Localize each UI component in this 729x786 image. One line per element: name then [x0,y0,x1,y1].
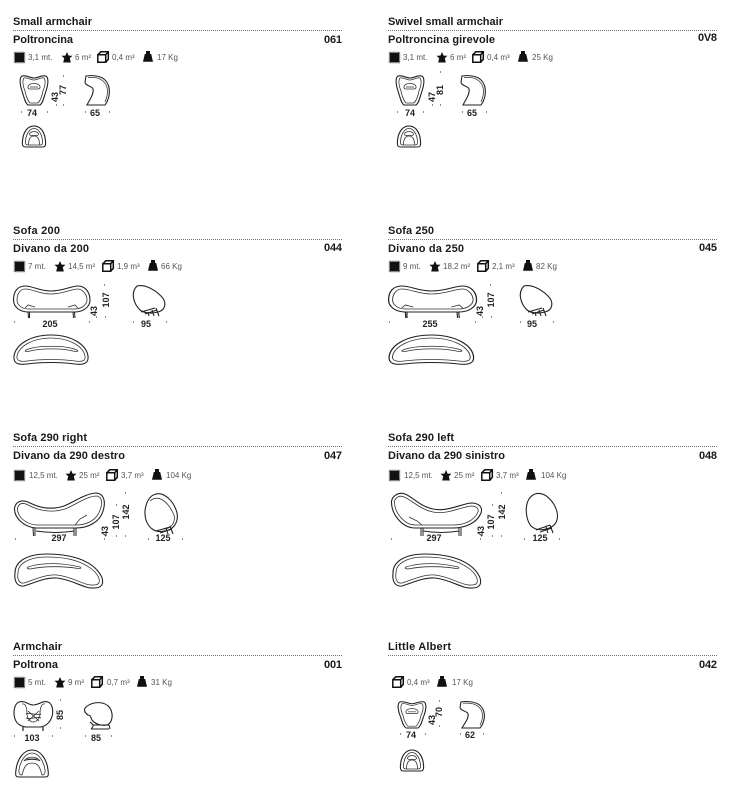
product code: 042 [699,659,717,671]
subheading: Poltroncina girevole: Poltroncina girevole [388,34,495,46]
specs row [390,51,553,62]
panel: Sofa 200 [13,225,343,364]
specs row: 7 mt. [28,262,46,271]
dimensions: 70 [434,707,444,717]
specs row: 0,4 m³ [112,53,135,62]
specs row: 3,7 m³ [496,471,519,480]
specs row: 9 mt. [403,262,421,271]
specs row: 0,7 m³ [107,678,130,687]
dimensions: 107 [486,292,496,308]
drawing: side view [145,494,177,534]
specs row: 2,1 m³ [492,262,515,271]
dimensions: 107 [486,514,496,530]
drawing: side view [461,76,485,105]
dimensions: 43 [427,715,437,725]
dimensions [14,700,112,743]
drawing: front view [389,286,477,318]
specs row [390,469,566,480]
specs row: 12,5 mt. [29,471,58,480]
specs row: 1,9 m³ [117,262,140,271]
dimensions [21,76,110,118]
product code: 045 [699,242,717,254]
drawing: plan view [14,335,88,364]
specs row: 0,4 m³ [487,53,510,62]
specs row: 25 m² [454,471,475,480]
heading: Sofa 250: Sofa 250 [388,225,434,237]
drawing: plan view [400,750,424,771]
dimensions: 107 [101,292,111,308]
dimensions: 125 [155,533,171,543]
panel: Armchair [13,641,342,777]
subheading: Poltrona: Poltrona [13,659,59,671]
specs row [14,51,178,62]
dimensions [397,72,487,118]
specs row: 12,5 mt. [404,471,433,480]
specs row: 104 Kg [541,471,566,480]
dimensions [389,285,554,329]
dimensions [14,285,167,329]
dimensions: 65 [467,108,477,118]
panel: Swivel small armchair [388,16,717,147]
panel: Sofa 250 [388,225,717,364]
specs row: 31 Kg [151,678,172,687]
drawing: side view [85,703,112,729]
dimensions: 297 [51,533,67,543]
heading: Sofa 290 right: Sofa 290 right [13,432,87,444]
specs row: 17 Kg [452,678,473,687]
dimensions: 297 [426,533,442,543]
specs row [393,676,473,687]
dimensions: 81 [435,85,445,95]
specs row: 82 Kg [536,262,557,271]
product code: 0V8 [698,32,717,44]
dimensions: 74 [406,730,416,740]
specs row: 18,2 m² [443,262,470,271]
dimensions: 85 [55,710,65,720]
subheading: Divano da 200: Divano da 200 [13,243,89,255]
dimensions: 43 [89,306,99,316]
dimensions: 43 [100,526,110,536]
heading: Sofa 290 left: Sofa 290 left [388,432,454,444]
drawing: front view [398,702,426,728]
subheading: Poltroncina: Poltroncina [13,34,74,46]
drawing: front view [14,702,53,731]
drawing: front view [20,76,48,105]
specs row: 25 m² [79,471,100,480]
panel: Little Albert [388,641,717,771]
dimensions: 74 [27,108,37,118]
dimensions: 205 [42,319,58,329]
specs row: 6 m² [450,53,466,62]
product code: 048 [699,450,717,462]
dimensions: 103 [24,733,40,743]
dimensions: 85 [91,733,101,743]
dimensions: 142 [121,504,131,520]
dimensions: 43 [50,92,60,102]
dimensions: 125 [532,533,548,543]
drawing: plan view [22,126,46,147]
panel: Small armchair [13,16,342,147]
dimensions: 95 [141,319,151,329]
heading: Sofa 200: Sofa 200 [13,225,60,237]
drawing: side view [133,286,165,316]
dimensions: 95 [527,319,537,329]
drawing: plan view [389,335,474,364]
drawing: plan view [16,750,48,777]
drawing: plan view [397,126,421,147]
product code: 047 [324,450,342,462]
dimensions: 255 [422,319,438,329]
dimensions [15,493,183,543]
product code: 061 [324,34,342,46]
drawing: side view [526,493,558,533]
specs row [390,260,557,272]
dimensions: 142 [497,504,507,520]
dimensions: 65 [90,108,100,118]
panel: Sofa 290 right [13,432,342,588]
dimensions [400,701,484,740]
specs row: 0,4 m³ [407,678,430,687]
specs row: 17 Kg [157,53,178,62]
specs row: 5 mt. [28,678,46,687]
drawing: front view [391,493,482,536]
subheading: Divano da 290 destro: Divano da 290 destro [13,450,125,462]
heading: Swivel small armchair: Swivel small armchair [388,16,504,28]
drawing: front view [14,286,90,318]
dimensions [391,493,560,543]
specs row: 66 Kg [161,262,182,271]
specs row: 104 Kg [166,471,191,480]
drawing: plan view [393,554,481,588]
product code: 001 [324,659,342,671]
drawing: front view [396,76,424,105]
specs row: 14,5 m² [68,262,95,271]
dimensions: 107 [111,514,121,530]
specs row: 3,1 mt. [403,53,427,62]
dimensions: 43 [475,306,485,316]
drawing: front view [14,493,104,536]
drawing: side view [85,76,109,105]
drawing: side view [520,286,552,316]
specs row: 9 m² [68,678,84,687]
subheading: Divano da 250: Divano da 250 [388,243,464,255]
heading: Small armchair: Small armchair [13,16,93,28]
dimensions: 74 [405,108,415,118]
specs row: 3,1 mt. [28,53,52,62]
dimensions: 47 [427,92,437,102]
specs row [14,469,191,480]
specs row: 25 Kg [532,53,553,62]
panel: Sofa 290 left [388,432,717,588]
drawing: plan view [15,554,103,588]
dimensions: 43 [476,526,486,536]
specs row [14,260,182,272]
specs row: 6 m² [75,53,91,62]
subheading: Divano da 290 sinistro: Divano da 290 sinistro [388,450,505,462]
heading: Armchair: Armchair [13,641,63,653]
specs row: 3,7 m³ [121,471,144,480]
dimensions: 62 [465,730,475,740]
product code: 044 [324,242,343,254]
heading: Little Albert: Little Albert [388,641,451,653]
specs row [14,676,172,688]
drawing: side view [460,702,484,728]
dimensions: 77 [58,85,68,95]
